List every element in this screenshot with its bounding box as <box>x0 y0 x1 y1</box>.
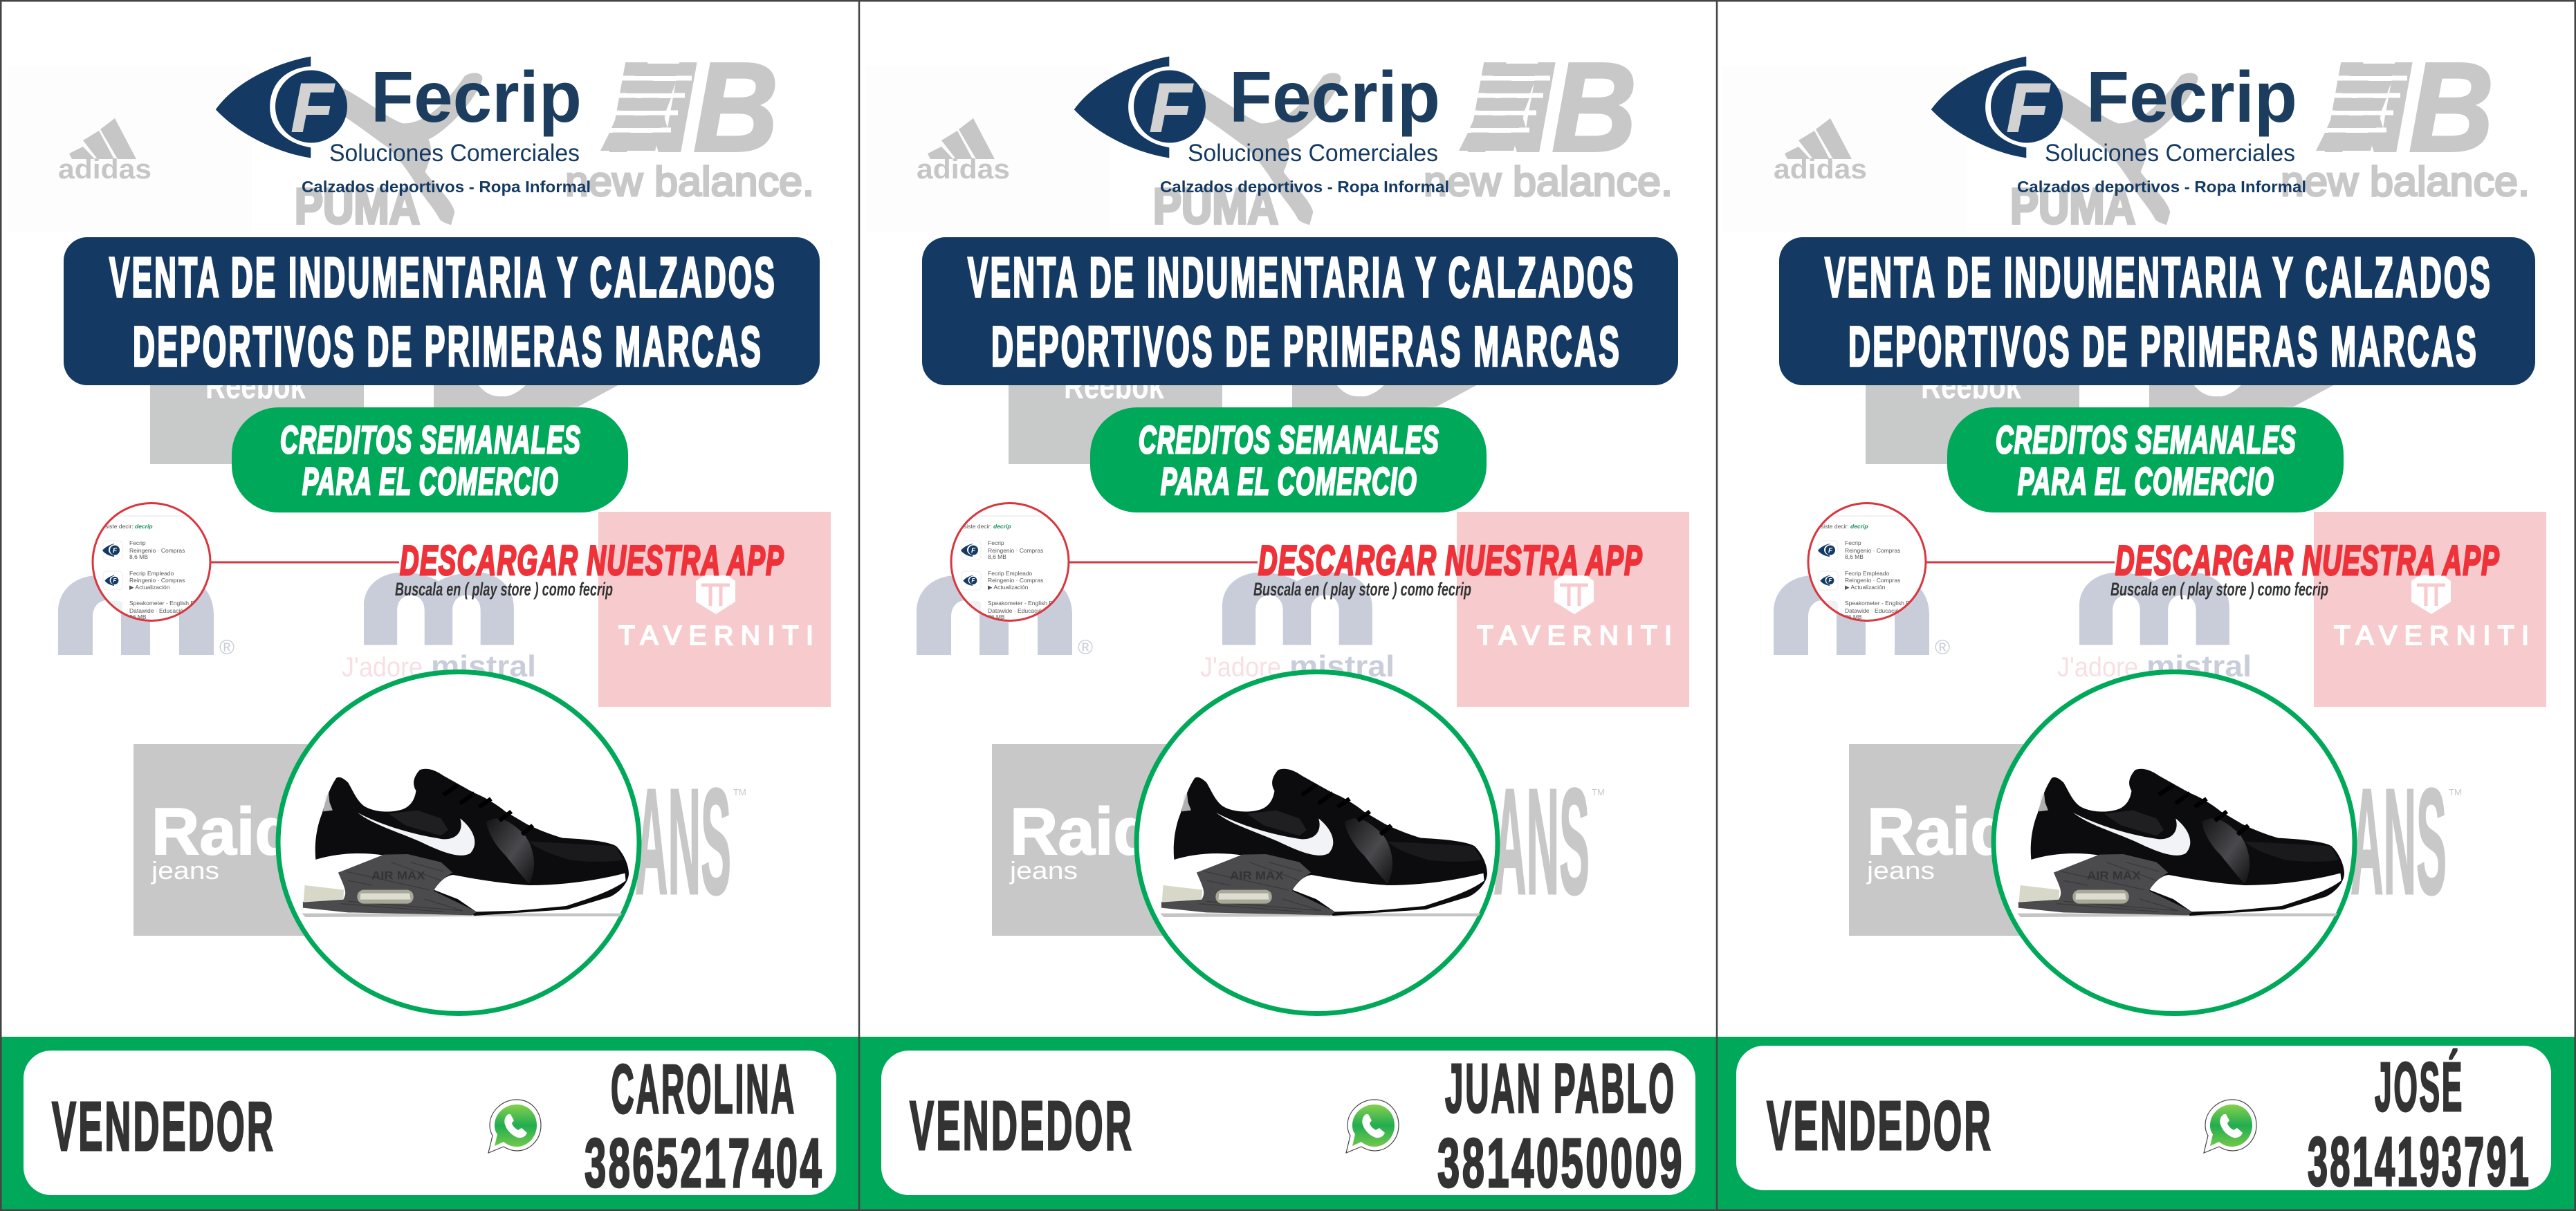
logo: new balance: new balance. <box>1424 158 1673 205</box>
logo: nike swoosh <box>1292 373 1498 415</box>
logo: mistral m <box>58 575 234 659</box>
icon: eye <box>1931 57 2063 158</box>
logo: nike swoosh <box>2149 373 2355 415</box>
label: VENDEDOR <box>1767 1087 1993 1165</box>
logo: taverniti: TAVERNITI <box>1477 621 1672 651</box>
logo: new balance <box>2281 36 2530 205</box>
banner: venta: VENTA DE INDUMENTARIA Y CALZADOS <box>109 246 777 309</box>
logo: j'adore mistral: J'adore <box>2057 652 2138 683</box>
app screenshot circle: Reingenio · Compras <box>988 547 1043 554</box>
panel: Carolina <box>1 36 858 1211</box>
app screenshot circle: ▶ Actualización <box>1845 584 1886 591</box>
product circle with shoe <box>1137 672 1498 1014</box>
logo: taverniti: TAVERNITI <box>618 621 813 651</box>
app screenshot circle: Speakometer - English Prop <box>988 600 1062 607</box>
company logo: Fecrip <box>216 57 591 196</box>
pill: creditos: CREDITOS SEMANALES <box>280 418 581 461</box>
logo: raid jeans <box>992 744 1172 936</box>
icon: eye <box>1074 57 1206 158</box>
logo: vans: TM <box>1592 787 1605 797</box>
logo: raid jeans <box>1849 744 2029 936</box>
icon: eye: F <box>2007 69 2050 146</box>
icon: whatsapp <box>2204 1100 2256 1153</box>
logo: raid jeans: Raid <box>1867 795 2011 869</box>
app screenshot circle: Fecrip <box>129 539 146 546</box>
tagline: Soluciones Comerciales <box>2045 140 2295 167</box>
app screenshot circle: Fecrip <box>1845 539 1861 546</box>
logo: adidas: adidas <box>1774 154 1867 185</box>
background brand logos <box>7 36 831 936</box>
logo: vans <box>635 758 746 926</box>
app screenshot circle: Speakometer - English Prop <box>1845 600 1919 607</box>
connector line <box>210 562 399 563</box>
logo: taverniti <box>598 512 831 707</box>
subtitle: Calzados deportivos - Ropa Informal <box>2017 178 2306 196</box>
pill: creditos <box>1090 407 1487 512</box>
logo: j'adore mistral <box>2057 573 2252 683</box>
logo: reebok: Reebok <box>205 367 306 407</box>
logo: raid jeans <box>134 744 313 936</box>
app screenshot circle: 26 MB <box>129 613 147 620</box>
panel: Juan Pablo <box>858 36 1717 1211</box>
logo: new balance: NB <box>609 36 778 178</box>
logo: new balance: new balance. <box>565 158 814 205</box>
app screenshot circle: ▶ Actualización <box>129 584 170 591</box>
logo: vans <box>2350 758 2462 926</box>
subtitle: Calzados deportivos - Ropa Informal <box>1160 178 1449 196</box>
logo: puma: PUMA <box>295 179 420 234</box>
app screenshot circle: siste decir: decrip <box>105 523 153 530</box>
logo: raid jeans: jeans <box>1866 856 1935 885</box>
logo: j'adore mistral <box>1200 573 1395 683</box>
logo: taverniti: TAVERNITI <box>2334 621 2529 651</box>
logo: raid jeans: jeans <box>1009 856 1078 885</box>
banner: venta <box>1779 237 2535 385</box>
app screenshot circle: Fecrip Empleado <box>988 570 1033 577</box>
app screenshot circle: Fecrip Empleado <box>1845 570 1890 577</box>
background brand logos <box>865 36 1689 936</box>
background brand logos <box>1722 36 2546 936</box>
tagline: Soluciones Comerciales <box>1188 140 1438 167</box>
logo: puma <box>2010 73 2198 234</box>
logo: taverniti <box>1457 512 1689 707</box>
logo: taverniti <box>2314 512 2546 707</box>
app screenshot circle: Fecrip Empleado <box>129 570 174 577</box>
icon: whatsapp <box>488 1100 541 1153</box>
logo: vans: TM <box>733 787 746 797</box>
pill: creditos <box>1947 407 2344 512</box>
logo: j'adore mistral: J'adore <box>342 652 423 683</box>
logo: new balance: NB <box>1467 36 1637 178</box>
app screenshot circle: 8,6 MB <box>988 553 1006 560</box>
banner: venta <box>922 237 1678 385</box>
app screenshot circle: Fecrip <box>988 539 1004 546</box>
heading: descargar: DESCARGAR NUESTRA APP <box>400 537 784 584</box>
footer: José: JOSÉ <box>2375 1048 2464 1126</box>
banner: venta: DEPORTIVOS DE PRIMERAS MARCAS <box>991 315 1621 378</box>
icon: whatsapp <box>1346 1100 1399 1153</box>
app screenshot circle: Speakometer - English Prop <box>129 600 203 607</box>
pill: creditos: PARA EL COMERCIO <box>1161 459 1417 503</box>
app screenshot circle: ▶ Actualización <box>988 584 1029 591</box>
app screenshot circle <box>948 503 1073 621</box>
logo: new balance <box>1424 36 1673 205</box>
logo: mistral m: ® <box>219 636 234 659</box>
logo: reebok <box>1009 346 1222 464</box>
logo: j'adore mistral <box>342 573 536 683</box>
app screenshot circle: Reingenio · Compras <box>1845 547 1900 554</box>
app screenshot circle: Datawide · Educación <box>129 607 187 614</box>
product circle with shoe <box>1994 672 2355 1014</box>
logo: adidas <box>7 66 252 232</box>
icon: eye <box>216 57 347 158</box>
logo: j'adore mistral: mistral <box>431 649 536 683</box>
pill: creditos: PARA EL COMERCIO <box>302 459 559 503</box>
text: buscala: Buscala en ( play store ) como fecrip <box>2110 579 2328 600</box>
background brand logos: ANS <box>1493 758 1590 926</box>
banner: venta: VENTA DE INDUMENTARIA Y CALZADOS <box>968 246 1635 309</box>
logo: vans: TM <box>2449 787 2462 797</box>
logo: mistral m: ® <box>1935 636 1950 659</box>
pill: creditos: PARA EL COMERCIO <box>2018 459 2274 503</box>
pill: creditos: CREDITOS SEMANALES <box>1996 418 2297 461</box>
footer: Juan Pablo <box>858 1037 1717 1211</box>
logo: adidas <box>1722 66 1967 232</box>
logo: j'adore mistral: mistral <box>1289 649 1395 683</box>
logo: puma: PUMA <box>1153 179 1278 234</box>
footer: Juan Pablo: JUAN PABLO <box>1445 1050 1676 1127</box>
logo: raid jeans: Raid <box>1010 795 1154 869</box>
logo: vans <box>1493 758 1605 926</box>
wordmark: Fecrip <box>2086 57 2297 138</box>
wordmark: Fecrip <box>1229 57 1440 138</box>
subtitle: Calzados deportivos - Ropa Informal <box>302 178 591 196</box>
panel: José <box>1715 36 2576 1211</box>
logo: j'adore mistral: J'adore <box>1200 652 1281 683</box>
background brand logos: ANS <box>635 758 731 926</box>
tagline: Soluciones Comerciales <box>329 140 580 167</box>
wordmark: Fecrip <box>371 57 582 138</box>
footer: Carolina: CAROLINA <box>611 1051 796 1128</box>
logo: mistral m <box>917 575 1093 659</box>
logo: raid jeans: Raid <box>151 795 295 869</box>
text: buscala: Buscala en ( play store ) como fecrip <box>1253 579 1471 600</box>
heading: descargar: DESCARGAR NUESTRA APP <box>1258 537 1643 584</box>
logo: new balance: new balance. <box>2281 158 2530 205</box>
logo: j'adore mistral: mistral <box>2146 649 2252 683</box>
logo: mistral m: ® <box>1078 636 1093 659</box>
app screenshot circle: Datawide · Educación <box>1845 607 1902 614</box>
footer: Carolina <box>1 1037 858 1211</box>
logo: puma: PUMA <box>2010 179 2135 234</box>
banner: venta: DEPORTIVOS DE PRIMERAS MARCAS <box>133 315 763 378</box>
app screenshot circle <box>1805 503 1930 621</box>
logo: new balance <box>565 36 814 205</box>
logo: reebok: Reebok <box>1064 367 1164 407</box>
seller phone: 3865217404 <box>585 1125 824 1202</box>
app screenshot circle: Datawide · Educación <box>988 607 1045 614</box>
logo: reebok <box>1866 346 2079 464</box>
logo: adidas: adidas <box>917 154 1010 185</box>
icon: eye: F <box>291 69 335 146</box>
app screenshot circle: siste decir: decrip <box>1821 523 1868 530</box>
pill: creditos <box>232 407 628 512</box>
logo: puma <box>295 73 482 234</box>
banner: venta <box>64 237 820 385</box>
app screenshot circle <box>90 503 214 621</box>
product circle with shoe <box>278 672 639 1014</box>
label: VENDEDOR <box>52 1088 275 1165</box>
app screenshot circle: 26 MB <box>1845 613 1862 620</box>
logo: puma <box>1153 73 1341 234</box>
logo: reebok <box>150 346 364 464</box>
app screenshot circle: Reingenio · Compras <box>129 577 185 584</box>
app screenshot circle: 8,6 MB <box>1845 553 1864 560</box>
logo: mistral m <box>1774 575 1950 659</box>
logo: reebok: Reebok <box>1921 367 2021 407</box>
connector line <box>1069 562 1258 563</box>
pill: creditos: CREDITOS SEMANALES <box>1139 418 1439 461</box>
label: VENDEDOR <box>910 1087 1134 1165</box>
app screenshot circle: Reingenio · Compras <box>988 577 1043 584</box>
app screenshot circle: 26 MB <box>988 613 1005 620</box>
logo: adidas <box>865 66 1110 232</box>
seller phone: 3814050009 <box>1437 1125 1684 1202</box>
logo: new balance: NB <box>2324 36 2494 178</box>
company logo: Fecrip <box>1931 57 2306 196</box>
icon: eye: F <box>1150 69 1193 146</box>
connector line <box>1926 562 2115 563</box>
app screenshot circle: 8,6 MB <box>129 553 148 560</box>
footer: José <box>1715 1037 2576 1211</box>
app screenshot circle: Reingenio · Compras <box>129 547 185 554</box>
company logo: Fecrip <box>1074 57 1449 196</box>
logo: nike swoosh <box>434 373 640 415</box>
app screenshot circle: Reingenio · Compras <box>1845 577 1900 584</box>
text: buscala: Buscala en ( play store ) como fecrip <box>395 579 613 600</box>
logo: raid jeans: jeans <box>151 856 219 885</box>
app screenshot circle: siste decir: decrip <box>964 523 1011 530</box>
logo: adidas: adidas <box>58 154 151 185</box>
